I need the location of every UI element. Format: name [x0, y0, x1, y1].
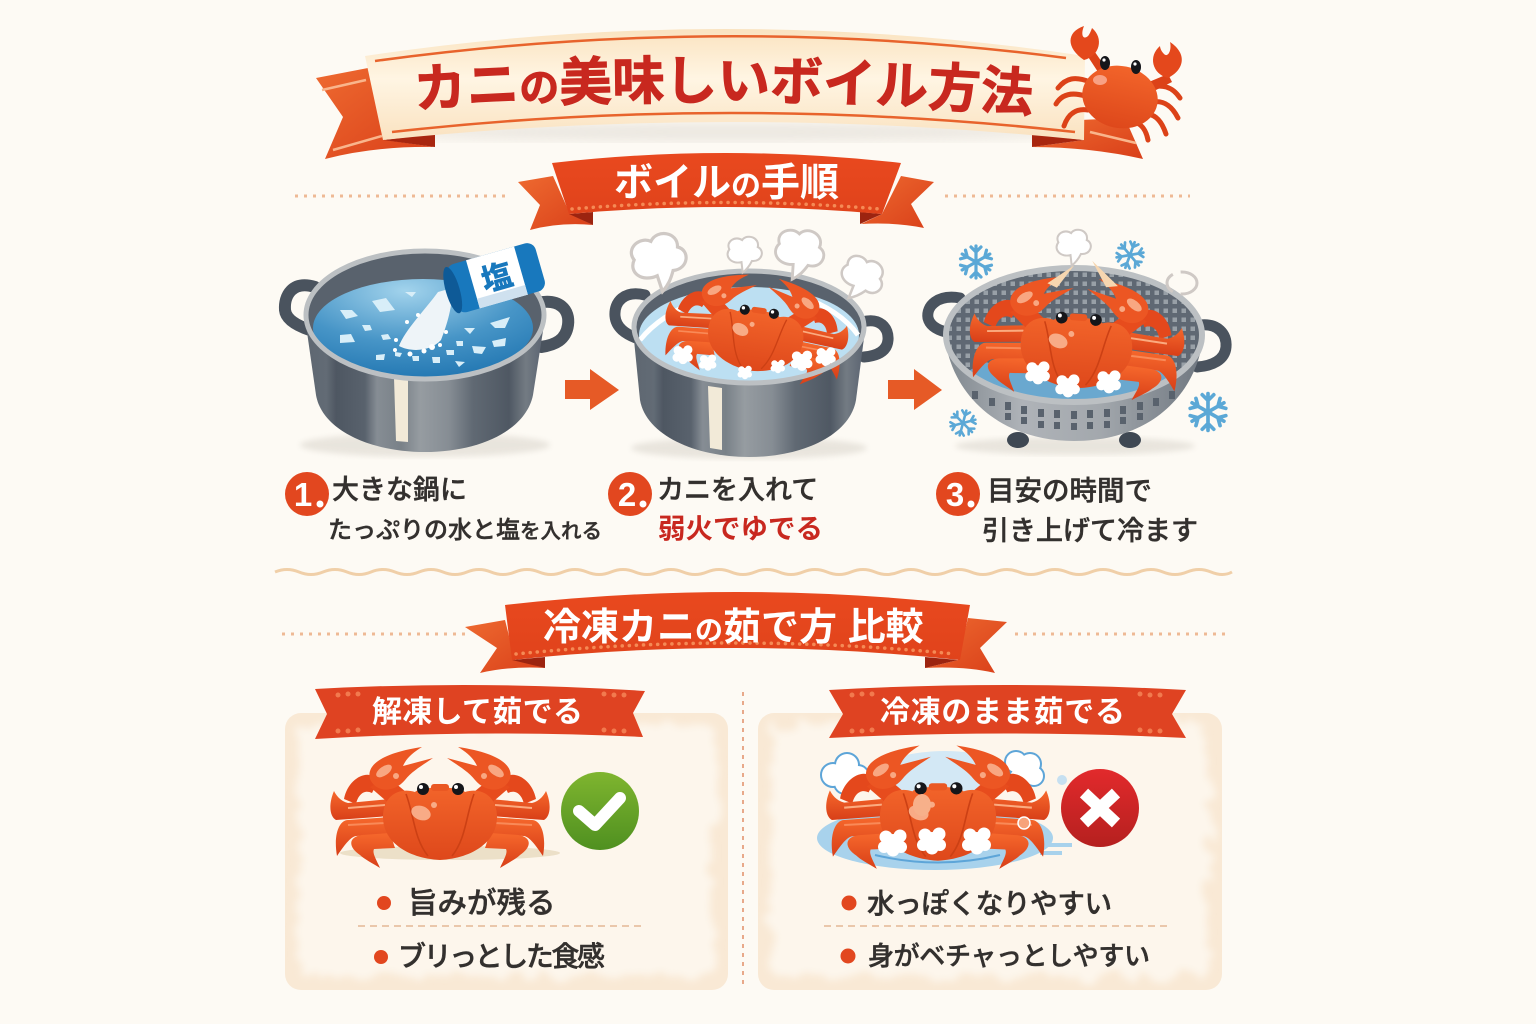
icon: frozen crab in water: [817, 745, 1076, 870]
foam: [1025, 361, 1121, 397]
point: firm texture: ブリっとした食感: [398, 941, 605, 972]
pot inside and rim: [307, 252, 543, 378]
panel heading ribbon: [829, 685, 1186, 738]
pot body: [633, 330, 865, 457]
icon: salt container: [439, 241, 547, 316]
step 2 caption: 弱火でゆでる: [658, 513, 823, 544]
foam: [672, 345, 836, 379]
pot handles: [285, 285, 568, 347]
steam: [1057, 230, 1197, 294]
arrow: step 1 to step 2: [565, 369, 619, 410]
step 2 caption: カニを入れて: [657, 475, 818, 505]
pot body: [305, 318, 545, 452]
section heading: boil steps: [295, 153, 1190, 230]
right ribbon tail: [1032, 118, 1143, 159]
colander feet: [1007, 432, 1029, 448]
step 1 caption: たっぷりの水と塩: [328, 517, 520, 544]
step 1 caption: [285, 472, 602, 544]
step 1: pot with water and salt: [285, 241, 568, 457]
panel: boil while frozen: [758, 685, 1222, 990]
crab in pot: [659, 264, 855, 390]
section heading: frozen crab comparison: [282, 592, 1225, 673]
colander bowl: [945, 338, 1203, 441]
panel heading ribbon: 冷凍のまま茹でる: [880, 696, 1125, 729]
step 3: colander with crab: [928, 230, 1227, 455]
step 3 caption: [936, 472, 1198, 546]
step 2 caption: 2: [618, 476, 636, 513]
panel heading ribbon: 解凍して茹でる: [372, 696, 583, 729]
icon: cross mark: [1061, 769, 1139, 847]
left ribbon tail: [316, 68, 435, 159]
crab in colander: [966, 253, 1190, 403]
step 2 caption: [608, 472, 823, 544]
section heading: boil steps: の手順: [731, 162, 839, 205]
salt stream: [393, 288, 452, 356]
section heading: frozen crab comparison: 冷凍カニ: [543, 607, 695, 649]
step 1 caption: 1: [294, 476, 312, 513]
colander inside with mesh: [945, 268, 1203, 402]
step 1 caption: を入れる: [520, 520, 602, 543]
point: watery: 水っぽくなりやすい: [867, 888, 1112, 919]
pot inside: [635, 272, 863, 382]
step 3 caption: 目安の時間で: [987, 475, 1152, 506]
section heading: boil steps: ボイル: [614, 162, 731, 205]
title banner: [316, 29, 1143, 159]
step 1 caption: 大きな鍋に: [332, 475, 467, 505]
point: mushy meat: 身がベチャっとしやすい: [868, 941, 1150, 971]
steam puff right: [1006, 752, 1043, 788]
step 2: pot with crab boiling: [615, 226, 891, 459]
cream banner band: [365, 29, 1085, 140]
steam clouds: [627, 226, 891, 309]
boiling water: [639, 287, 859, 383]
icon: check mark: [561, 772, 639, 850]
panel: thaw then boil: [285, 685, 728, 990]
colander handles: [928, 297, 1226, 367]
panel heading ribbon: [315, 685, 645, 739]
steam puff left: [822, 754, 868, 793]
arrow: step 2 to step 3: [888, 369, 942, 410]
icon: title crab: [1056, 26, 1182, 140]
water: [313, 279, 533, 377]
snowflakes: [947, 237, 1227, 439]
section heading: frozen crab comparison: の茹で方 比較: [695, 607, 924, 649]
title text: カニの美味しいボイル方法: [418, 54, 1032, 117]
icon: salt container: 塩: [477, 257, 517, 299]
icon: thawed crab: [330, 747, 560, 868]
pot handles: [615, 294, 888, 357]
colander holes: [972, 391, 1175, 430]
point: umami remains: 旨みが残る: [408, 887, 556, 920]
step 3 caption: 3: [946, 476, 964, 513]
step 3 caption: 引き上げて冷ます: [982, 516, 1198, 546]
